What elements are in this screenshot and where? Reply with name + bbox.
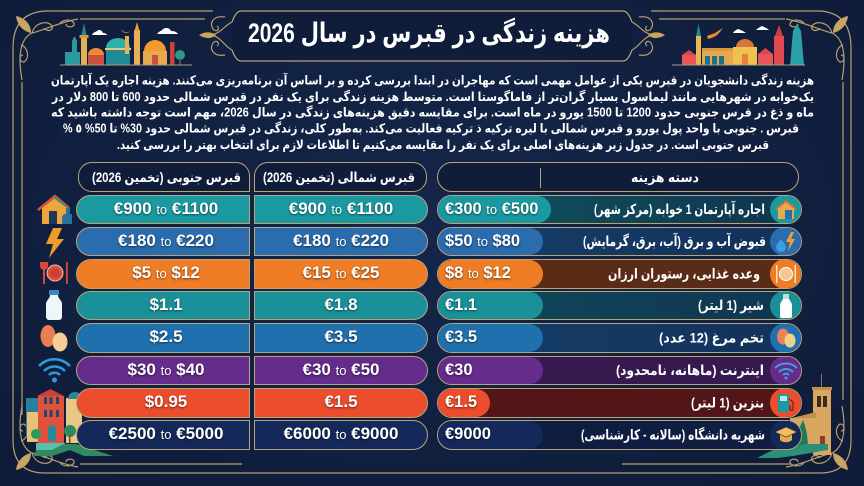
icon: lightning bolt: [46, 228, 64, 258]
icon: eggs: [770, 323, 801, 353]
north column: meal: €15 to €25: [302, 263, 380, 282]
illustration: right skyline: [672, 24, 805, 66]
value pill: €3.5: [445, 328, 477, 346]
intro paragraph: ماه و ذغ در قرس جنوبی حدود 1200 تا 1500 یورو در ماه است. برای مقایسه دقیق هزینه‌های زندگی در سال 2026، مهم است توجه داشته باشید که: [51, 105, 814, 121]
south column: utilities: €180 to €220: [118, 231, 214, 250]
value pill: [438, 228, 543, 255]
south column: eggs: [76, 323, 250, 353]
value pill: €9000: [445, 425, 491, 443]
south column: internet: $30 to $40: [127, 360, 205, 379]
value pill: [438, 260, 543, 288]
north column: internet: €30 to €50: [302, 360, 380, 379]
icon: milk bottle: [770, 291, 801, 320]
north column: utilities: [254, 227, 428, 256]
column header: north Cyprus: قبرس شمالی (تخمین 2026): [263, 170, 415, 185]
illustration: bottom-right town: [757, 374, 832, 458]
value pill: €1.5: [445, 393, 477, 411]
illustration: bottom-left village: [26, 389, 113, 456]
icon: house: [770, 195, 801, 224]
row: internet: [437, 356, 802, 385]
row: utilities: [437, 227, 802, 256]
north column: internet: [254, 356, 428, 385]
value pill: $8 to $12: [445, 264, 511, 282]
intro paragraph: [51, 72, 814, 153]
label: اجاره آپارتمان 1 خوابه (مرکز شهر): [594, 200, 765, 218]
icon: fuel pump: [770, 388, 801, 418]
south column: tuition: €2500 to €5000: [109, 424, 223, 443]
value pill: $50 to $80: [445, 232, 520, 250]
intro paragraph: هزینه زندگی دانشجویان در قبرس یکی از عوامل مهمی است که مهاجران در ابتدا بررسی کرده و بر اساس آن برنامه‌ریزی می‌کنند. هزینه اجاره یک آپارتمان: [51, 73, 814, 89]
column header: north Cyprus: [254, 162, 427, 192]
south column: fuel: $0.95: [145, 392, 187, 411]
value pill: [438, 421, 543, 449]
title: هزینه زندگی در قبرس در سال 2026: [248, 17, 610, 49]
icon: wifi: [770, 356, 801, 385]
icon: eggs: [40, 325, 68, 352]
row: meal: [437, 259, 802, 289]
north column: tuition: [254, 420, 428, 450]
north column: utilities: €180 to €220: [293, 231, 389, 250]
value pill: [438, 357, 543, 384]
icon: graduation cap: [770, 420, 801, 450]
icon: wifi: [38, 358, 71, 382]
south column: internet: [76, 356, 250, 385]
intro paragraph: قبرس . جنوبی با واحد پول یورو و قبرس شمالی با لیره ترکیه ذ ترکیه فعالیت می‌کند. به‌طور کلی، زندگی در قبرس شمالی حدود 30% تا 50% ٥ %: [63, 121, 799, 137]
row: eggs: [437, 323, 802, 353]
row: fuel: [437, 388, 802, 418]
north column: rent: €900 to €1100: [289, 199, 393, 218]
row: milk: [437, 291, 802, 320]
north column: fuel: [254, 388, 428, 418]
value pill: €1.1: [445, 296, 477, 314]
row: tuition: [437, 420, 802, 450]
south column: meal: $5 to $12: [132, 263, 200, 282]
intro paragraph: یک‌خوابه در شهرهایی مانند لیماسول بسیار گران‌تر از فاماگوستا است. متوسط هزینه زندگی برای یک نفر در قبرس شمالی حدود 600 تا 800 دلار در: [51, 89, 814, 105]
north column: rent: [254, 195, 428, 224]
row: rent: [437, 195, 802, 224]
north column: eggs: €3.5: [324, 327, 358, 346]
north column: meal: [254, 259, 428, 289]
value pill: [438, 324, 543, 352]
south column: fuel: [76, 388, 250, 418]
column header: expense category: [437, 162, 799, 192]
south column: meal: [76, 259, 250, 289]
intro paragraph: قبرس جنوبی است. در جدول زیر هزینه‌های اصلی برای یک نفر را مقایسه می‌کنیم تا اطلاعات لازم برای انتخاب بهتر را بررسی کنید.: [117, 139, 769, 153]
south column: tuition: [76, 420, 250, 450]
value pill: €30: [445, 361, 473, 379]
south column: rent: €900 to €1100: [114, 199, 218, 218]
icon: plate and cutlery: [40, 262, 68, 284]
column header: south Cyprus: قبرس جنوبی (تخمین 2026): [92, 170, 241, 185]
north column: eggs: [254, 323, 428, 353]
label: بنزین (1 لیتر): [691, 394, 764, 412]
label: اینترنت (ماهانه، نامحدود): [616, 362, 764, 379]
illustration: left skyline: [60, 22, 192, 66]
south column: milk: $1.1: [149, 295, 183, 314]
north column: milk: €1.8: [324, 295, 358, 314]
south column: rent: [76, 195, 250, 224]
north column: tuition: €6000 to €9000: [284, 424, 398, 443]
south column: milk: [76, 291, 250, 320]
label: تخم مرغ (12 عدد): [659, 330, 764, 346]
column header: south Cyprus: [78, 162, 250, 192]
icon: milk bottle: [46, 290, 62, 320]
north column: fuel: €1.5: [324, 392, 358, 411]
icon: house: [37, 194, 72, 224]
value pill: [438, 292, 543, 319]
value pill: €300 to €500: [445, 200, 538, 218]
column header: expense category: دسته هزینه: [631, 170, 699, 185]
title box outline: [232, 10, 632, 62]
value pill: [438, 196, 551, 223]
icon: plate: [770, 259, 801, 289]
south column: utilities: [76, 227, 250, 256]
value pill: [438, 389, 490, 417]
south column: eggs: $2.5: [149, 327, 183, 346]
north column: milk: [254, 291, 428, 320]
label: شیر (1 لیتر): [698, 297, 764, 314]
label: وعده غذایی، رستوران ارزان: [608, 266, 760, 282]
icon: water and lightning: [770, 227, 801, 256]
